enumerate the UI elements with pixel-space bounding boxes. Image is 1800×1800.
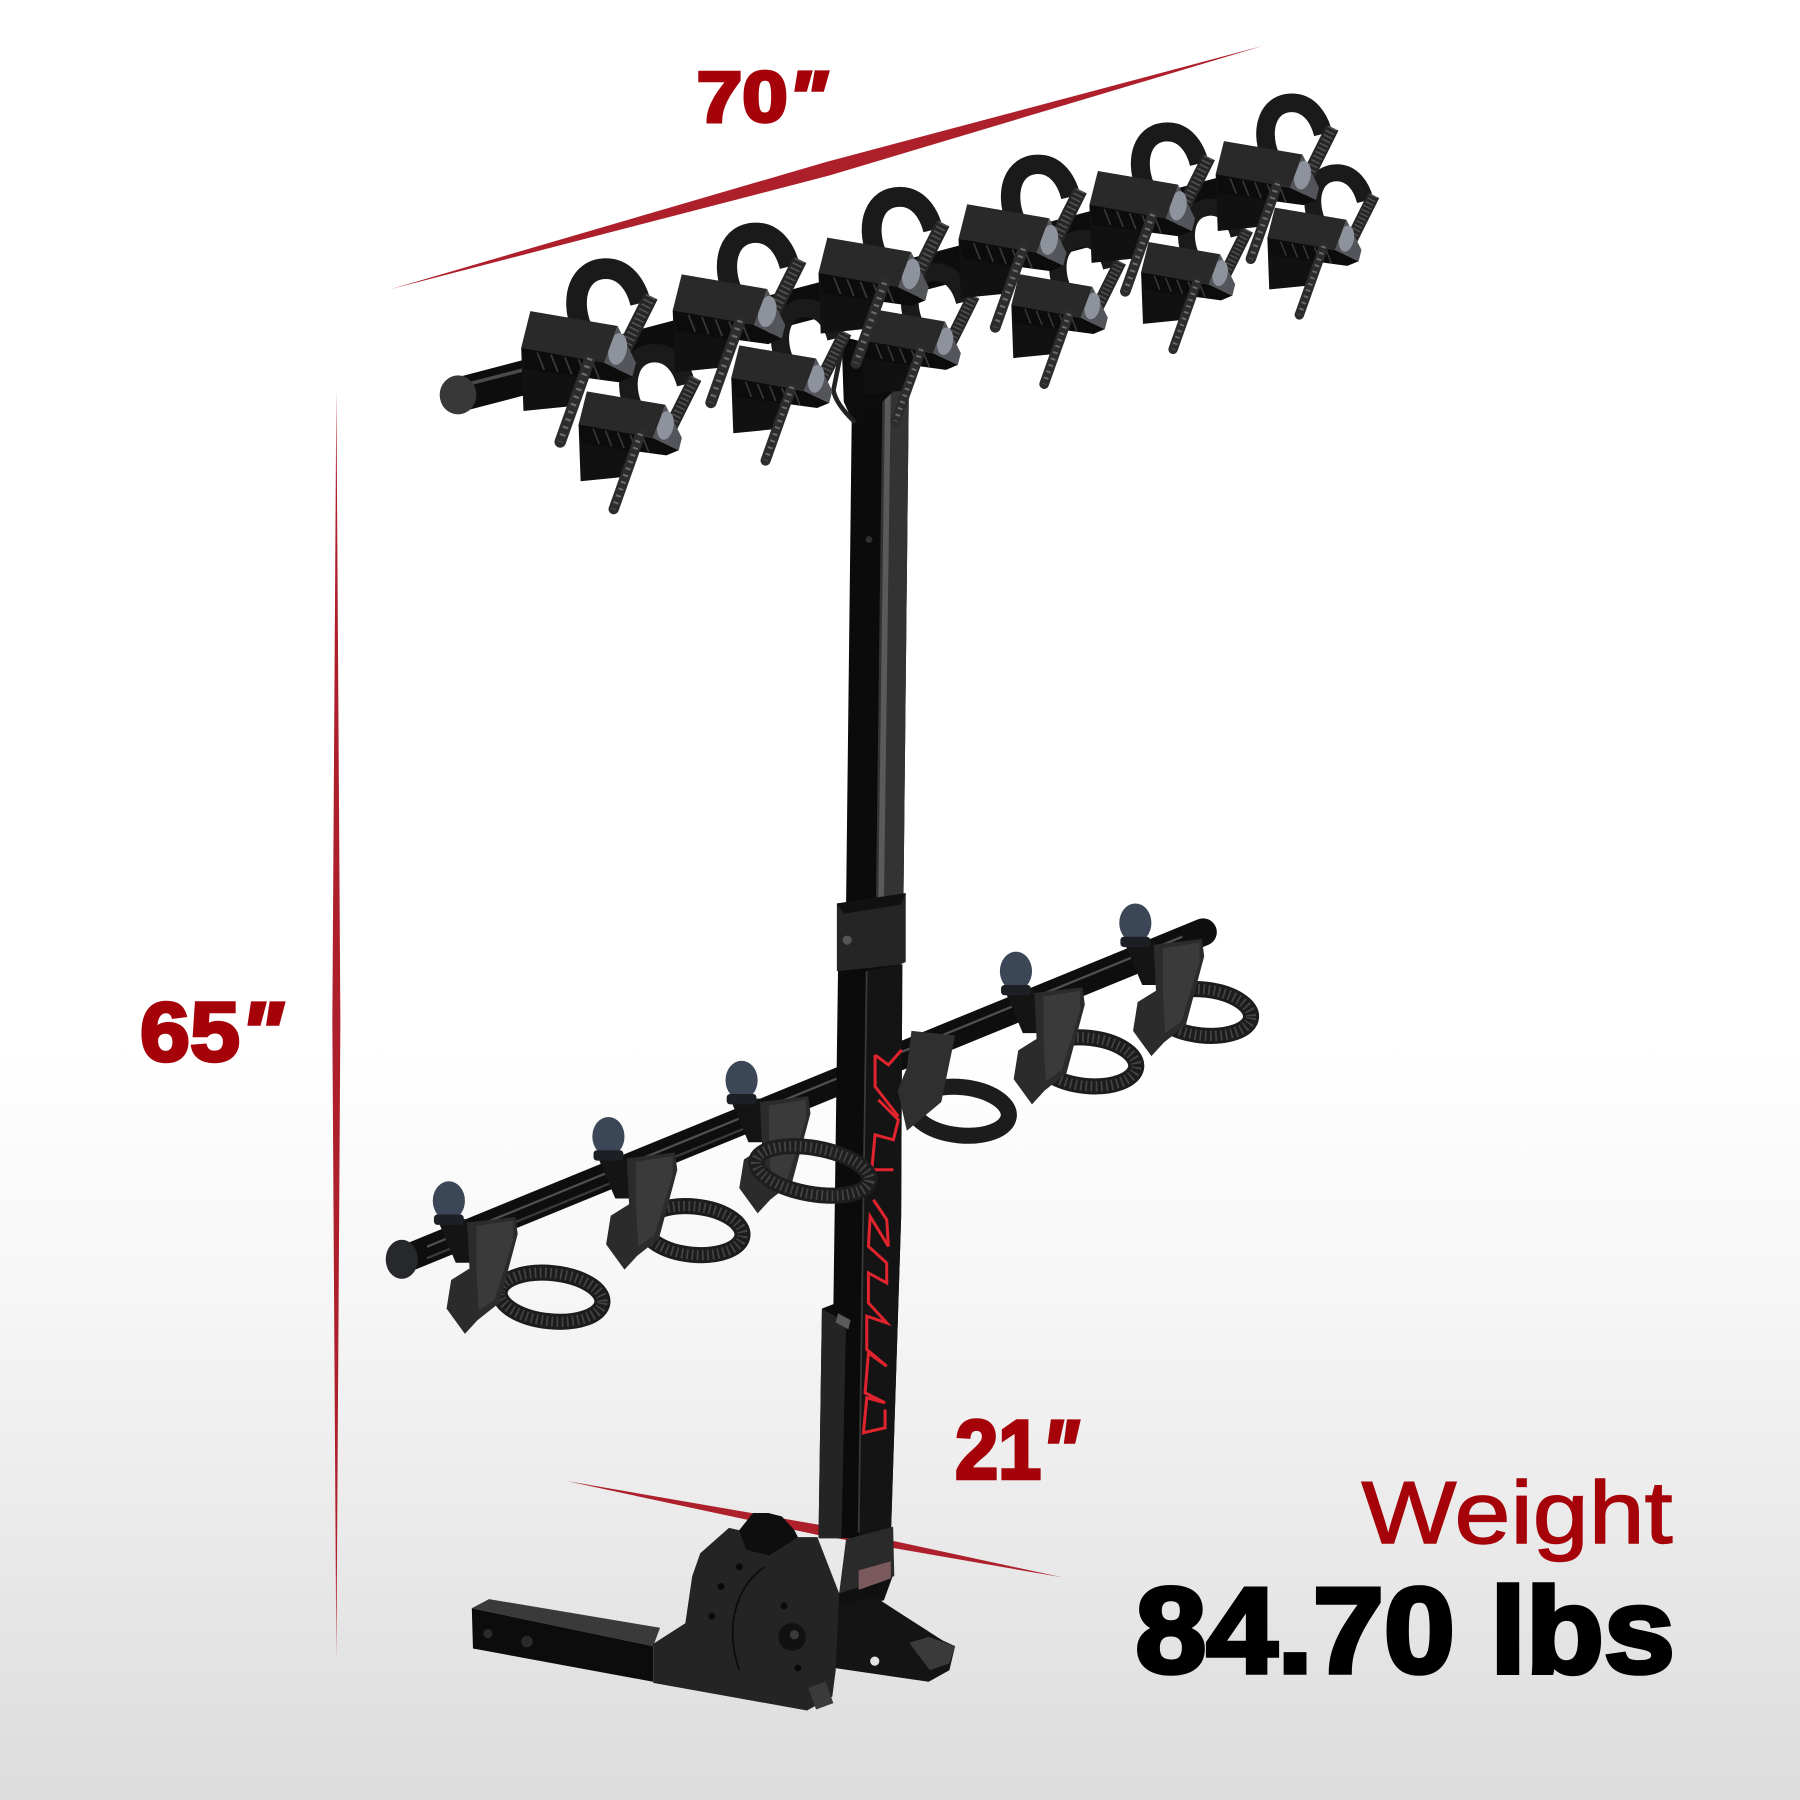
upper clamps, front row: [521, 103, 1332, 442]
dimension label: 21 inches: 21": [955, 1403, 1079, 1497]
lower crossbar: [386, 932, 1203, 1279]
mast logo in red outline: [863, 1050, 902, 1433]
pivot plate: [653, 1513, 839, 1710]
mast: upper tube: [833, 336, 909, 907]
dimension label: 65 inches: 65": [140, 985, 284, 1079]
weight label: Weight: [1361, 1463, 1673, 1562]
hitch receiver tube: [472, 1599, 660, 1682]
upper clamps, rear row: [579, 173, 1374, 509]
top bar with upper clamps behind the mast: [440, 184, 1263, 414]
hangers on lower crossbar: [433, 903, 1204, 1334]
hanger and strap in front of the mast: [752, 1031, 955, 1203]
mast base collar and label: [837, 1527, 894, 1612]
mast: lower tube: [818, 964, 902, 1538]
dimension line: 65 inch height: [332, 390, 340, 1659]
product: hitch bike rack: [386, 103, 1374, 1710]
weight value: 84.70 lbs: [1135, 1563, 1675, 1699]
dimension line: 21 inch depth: [566, 1481, 1062, 1577]
dimension line: 70 inch width: [390, 46, 1263, 289]
foot pedal: [835, 1597, 955, 1682]
mast: collar: [837, 893, 906, 971]
dimension label: 70 inches: 70": [697, 59, 828, 138]
lower straps behind the mast: [497, 985, 1253, 1327]
